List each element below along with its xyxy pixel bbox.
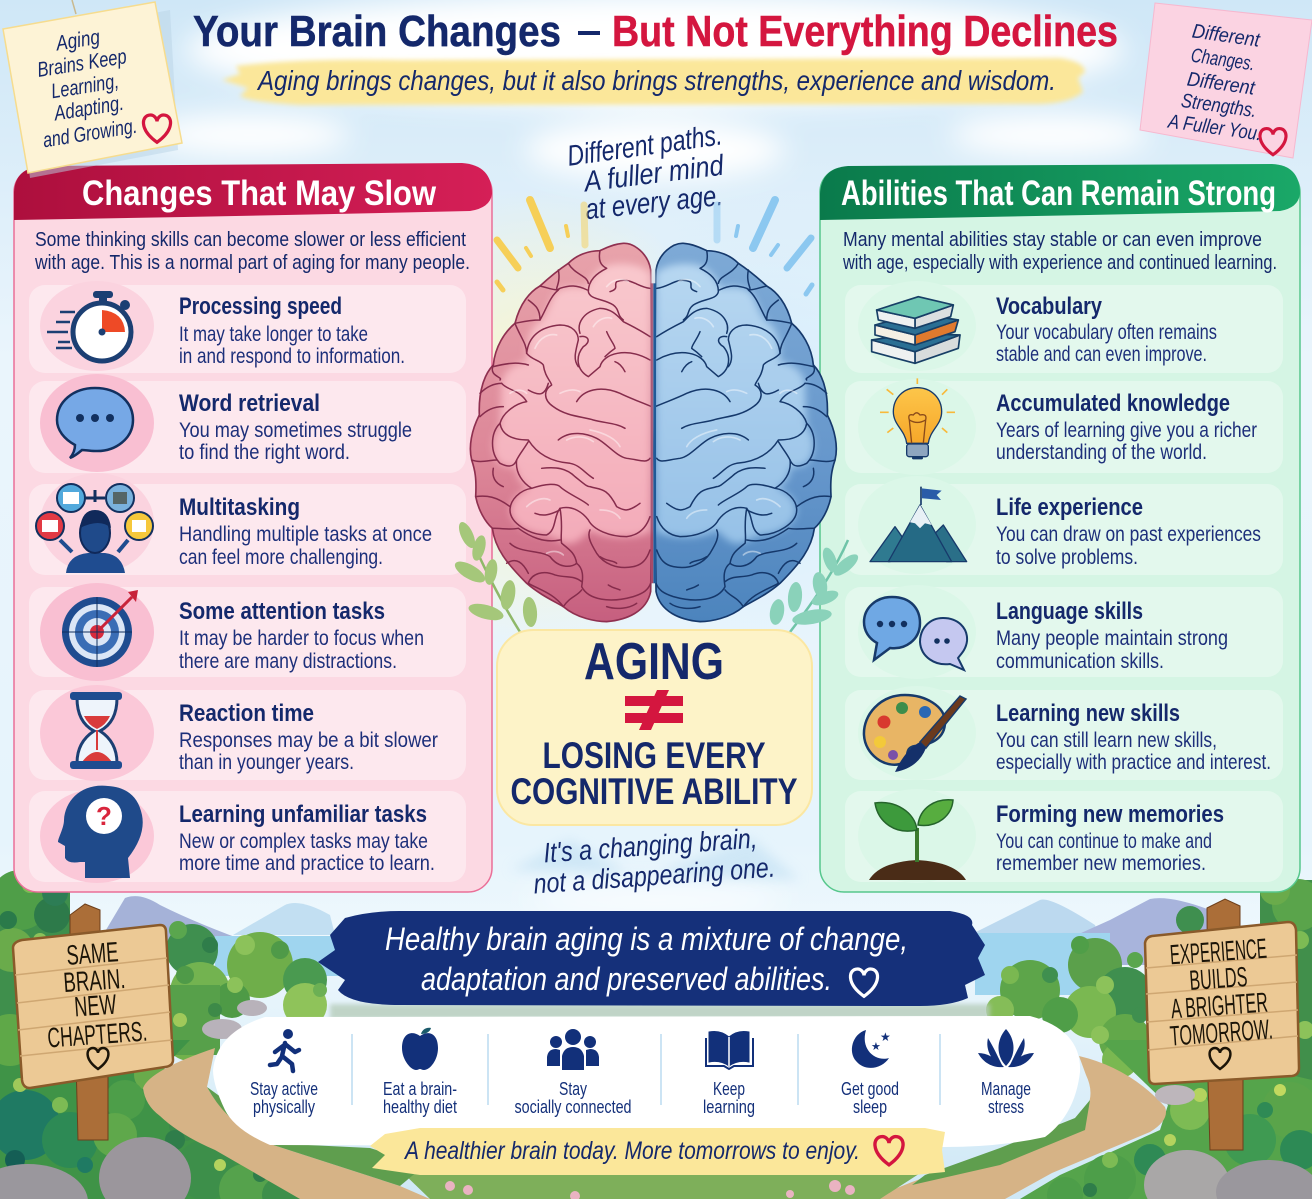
landscape (0, 838, 1312, 1199)
habit: manage stress (978, 1029, 1034, 1117)
habit: socially connected (514, 1029, 632, 1117)
card: word retrieval (29, 374, 466, 473)
branch: right leaves (768, 540, 861, 632)
habit: stay active (250, 1029, 318, 1117)
text: life experience: to solve problems. (996, 546, 1138, 569)
foliage texture right (1001, 931, 1312, 1197)
habit: socially connected: Stay (559, 1079, 587, 1099)
habit: good sleep (841, 1030, 899, 1117)
habit: good sleep: ★ (880, 1030, 891, 1044)
text: language skills: Many people maintain strong (996, 627, 1228, 650)
text: accumulated knowledge (996, 390, 1257, 464)
sign: right (1145, 899, 1299, 1150)
callout text: COGNITIVE ABILITY (510, 771, 798, 812)
icon: multitasking person (36, 473, 154, 573)
brain glow (340, 190, 970, 650)
text: multitasking (179, 494, 432, 569)
brain: left pink hemisphere (470, 243, 653, 622)
card: language skills (845, 585, 1283, 679)
handwritten tagline: It's a changing brain, (543, 823, 758, 868)
sticky note: left (3, 0, 182, 178)
intro text: Many mental abilities stay stable or can even improve (843, 229, 1262, 251)
habit: keep learning (703, 1032, 755, 1117)
icon: heart (1260, 128, 1286, 155)
panel: abilities that can remain strong (820, 164, 1300, 892)
rays: blue (717, 200, 812, 294)
text: language skills: Language skills (996, 598, 1143, 625)
icon: mountain with flag (858, 476, 976, 574)
intro text (842, 229, 1277, 274)
sticky note: right (1140, 3, 1312, 158)
card: forming new memories (845, 789, 1283, 883)
text: reaction time: than in younger years. (179, 751, 354, 774)
subtitle banner (222, 58, 1085, 105)
habit: good sleep: Get good (841, 1079, 899, 1099)
sign text: NEW (73, 989, 118, 1022)
strip under banner (330, 1004, 990, 1020)
sign text: CHAPTERS. (46, 1016, 148, 1053)
intro text (34, 229, 470, 274)
text: accumulated knowledge: understanding of the world. (996, 441, 1207, 464)
callout text (510, 735, 798, 812)
card: life experience (845, 476, 1283, 575)
text: accumulated knowledge: Years of learning give you a richer (996, 419, 1257, 442)
habit: socially connected: socially connected (514, 1097, 632, 1117)
text: multitasking: Handling multiple tasks at once (179, 523, 432, 546)
center handwritten note: at every age. (584, 180, 724, 226)
subtitle banner: Aging brings changes, but it also brings strengths, experience and wisdom. (256, 65, 1056, 96)
text: unfamiliar tasks: New or complex tasks may take (179, 830, 428, 853)
text: vocabulary: Your vocabulary often remains (996, 321, 1217, 344)
sticky note: right: Different (1186, 68, 1257, 100)
card: learning new skills (845, 686, 1283, 780)
sticky note: right: A Fuller You. (1166, 111, 1263, 145)
title: But Not Everything Declines (612, 7, 1118, 56)
text: language skills: communication skills. (996, 650, 1164, 673)
center handwritten note (565, 119, 726, 226)
icon: sprout (858, 789, 976, 883)
card: reaction time (29, 685, 466, 781)
sticky note: left: Aging (53, 26, 102, 56)
icon: books (858, 281, 976, 371)
text: learning new skills: Learning new skills (996, 700, 1180, 727)
habit: good sleep: ★ (871, 1041, 881, 1053)
sticky note: left: and Growing. (41, 115, 139, 152)
sticky note: left: Learning, (50, 70, 120, 103)
panel: changes that may slow (14, 163, 492, 892)
dividers (352, 1034, 940, 1105)
soft clouds (150, 0, 1150, 910)
mountains (100, 838, 1210, 965)
text: processing speed: in and respond to information. (179, 345, 405, 368)
handwritten tagline (533, 823, 776, 899)
text: life experience: You can draw on past experiences (996, 523, 1261, 546)
rocks (0, 1000, 1312, 1199)
banner: healthy brain aging: Healthy brain aging is a mixture of change, (385, 921, 908, 957)
text: attention tasks: Some attention tasks (179, 598, 385, 625)
text: accumulated knowledge: Accumulated knowledge (996, 390, 1230, 417)
panel header (820, 164, 1300, 220)
text: word retrieval: Word retrieval (179, 390, 320, 417)
habit: healthy diet: healthy diet (383, 1097, 457, 1117)
icon: two speech bubbles (858, 585, 976, 679)
not-equal sign (625, 690, 683, 730)
habit: stay active: Stay active (250, 1079, 318, 1099)
sign text (46, 936, 148, 1053)
callout text: LOSING EVERY (542, 735, 766, 776)
callout: aging is not losing every ability (497, 630, 812, 825)
sign text: SAME (65, 936, 119, 971)
sign text: BUILDS (1188, 961, 1248, 996)
icon: heart (850, 969, 878, 996)
icon: stopwatch (40, 281, 154, 371)
text: attention tasks (179, 598, 424, 673)
sticky note: right: Strengths. (1180, 90, 1258, 122)
sign: left (13, 904, 173, 1140)
banner: healthy brain aging: adaptation and preserved abilities. (421, 961, 832, 997)
icon: head with question (40, 786, 154, 883)
habit: healthy diet (383, 1028, 457, 1117)
card: accumulated knowledge (845, 378, 1283, 475)
text: life experience (996, 494, 1261, 569)
text: word retrieval: You may sometimes struggle (179, 419, 412, 442)
text: attention tasks: It may be harder to focus when (179, 627, 424, 650)
banner: healthier brain today: A healthier brain today. More tomorrows to enjoy. (403, 1137, 860, 1165)
text: life experience: Life experience (996, 494, 1143, 521)
rays: yellow (497, 200, 585, 290)
text: unfamiliar tasks (179, 801, 435, 875)
icon: speech bubble (40, 374, 154, 472)
panel body (14, 168, 492, 892)
text: processing speed: Processing speed (179, 293, 342, 320)
text: forming new memories: remember new memories. (996, 852, 1206, 875)
text: forming new memories: Forming new memories (996, 801, 1224, 828)
icon: heart (1210, 1048, 1230, 1069)
banner: healthy brain aging (318, 911, 985, 1006)
intro text: Some thinking skills can become slower or less efficient (35, 229, 466, 251)
text: unfamiliar tasks: more time and practice to learn. (179, 852, 435, 875)
callout word: aging: AGING (584, 633, 724, 691)
icon: heart (143, 115, 171, 142)
card: multitasking (29, 473, 466, 575)
text: vocabulary (996, 293, 1217, 366)
text: reaction time: Responses may be a bit slower (179, 729, 438, 752)
card: unfamiliar tasks (29, 786, 466, 883)
card: processing speed (29, 281, 466, 373)
text: attention tasks: there are many distractions. (179, 650, 397, 673)
title: Your Brain Changes (193, 7, 561, 56)
habit: keep learning: Keep (713, 1079, 745, 1099)
habit: keep learning: learning (703, 1097, 755, 1117)
sticky note: right: Different (1191, 20, 1262, 52)
text: processing speed: It may take longer to take (179, 323, 368, 346)
text: forming new memories (996, 801, 1224, 875)
icon: head with question: ? (96, 801, 112, 831)
handwritten tagline: not a disappearing one. (533, 852, 776, 899)
dirt path left (143, 1048, 430, 1199)
text: language skills (996, 598, 1228, 673)
center handwritten note: Different paths. (565, 119, 724, 173)
icon: heart (88, 1048, 108, 1069)
panel header (14, 163, 492, 220)
brain: right blue hemisphere (653, 243, 836, 622)
habit: good sleep: sleep (853, 1097, 887, 1117)
heading: Changes That May Slow (82, 174, 437, 213)
branch: left leaves (452, 520, 538, 632)
center handwritten note: A fuller mind (581, 150, 726, 199)
dirt path right (870, 1056, 1166, 1199)
banner: healthier brain today (370, 1128, 945, 1175)
sticky note: left: Adapting. (51, 92, 125, 126)
text: multitasking: Multitasking (179, 494, 300, 521)
icon: hourglass (40, 685, 154, 781)
sign text: BRAIN. (62, 963, 126, 998)
text: vocabulary: stable and can even improve. (996, 343, 1207, 366)
text: learning new skills (996, 700, 1271, 774)
text: reaction time: Reaction time (179, 700, 314, 727)
icon: target (40, 583, 154, 681)
card: vocabulary (845, 281, 1283, 373)
habit: healthy diet: Eat a brain- (383, 1079, 457, 1099)
text: unfamiliar tasks: Learning unfamiliar tasks (179, 801, 427, 828)
panel body (820, 168, 1300, 892)
habit: manage stress: stress (988, 1097, 1024, 1117)
text: reaction time (179, 700, 438, 774)
brain (470, 243, 836, 622)
text: word retrieval: to find the right word. (179, 441, 350, 464)
foliage texture left (0, 877, 327, 1182)
grass centre (400, 1170, 925, 1199)
intro text: with age. This is a normal part of aging for many people. (34, 252, 470, 274)
icon: palette and brush (858, 686, 976, 780)
flowers (445, 1180, 855, 1199)
text: multitasking: can feel more challenging. (179, 546, 383, 569)
icon: light bulb (858, 378, 976, 475)
icon: heart (875, 1136, 903, 1165)
text: vocabulary: Vocabulary (996, 293, 1103, 320)
text: learning new skills: You can still learn new skills, (996, 729, 1217, 752)
lake (215, 933, 1110, 995)
grass edging (207, 1087, 1090, 1186)
text: processing speed (179, 293, 405, 368)
habit: manage stress: Manage (981, 1079, 1031, 1099)
text: forming new memories: You can continue to make and (996, 830, 1212, 853)
text: word retrieval (179, 390, 412, 464)
trees left (0, 870, 327, 1199)
sticky note: right: Changes. (1190, 45, 1256, 75)
panel: healthy habits (213, 1016, 1080, 1147)
trees right (986, 875, 1312, 1199)
title (193, 7, 1118, 56)
sticky note: left: Brains Keep (36, 45, 128, 82)
habit: stay active: physically (253, 1097, 315, 1117)
card: attention tasks (29, 583, 466, 681)
sign text (1169, 933, 1274, 1052)
